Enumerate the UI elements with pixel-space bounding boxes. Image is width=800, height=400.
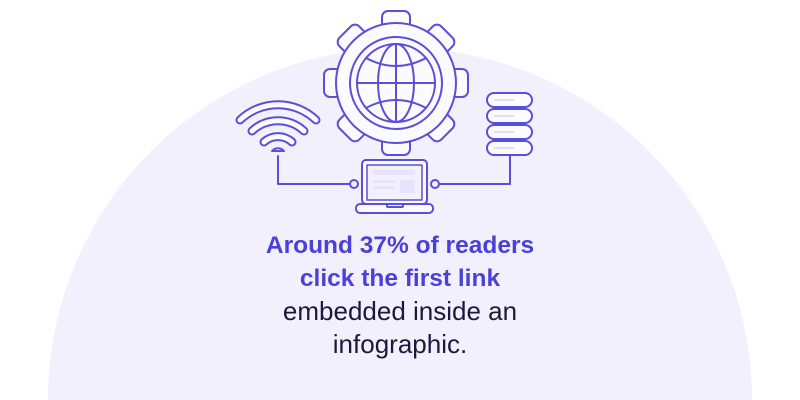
headline (266, 232, 534, 292)
icon: server stack (487, 93, 532, 155)
connector lines (278, 156, 510, 188)
body text: infographic. (333, 329, 467, 359)
icon: wifi (240, 105, 316, 151)
headline: Around 37% of readers (266, 232, 534, 259)
headline: click the first link (300, 265, 500, 292)
body text (283, 296, 517, 359)
icon: laptop (356, 160, 433, 213)
icon: gear with globe (324, 11, 468, 155)
body text: embedded inside an (283, 296, 517, 326)
